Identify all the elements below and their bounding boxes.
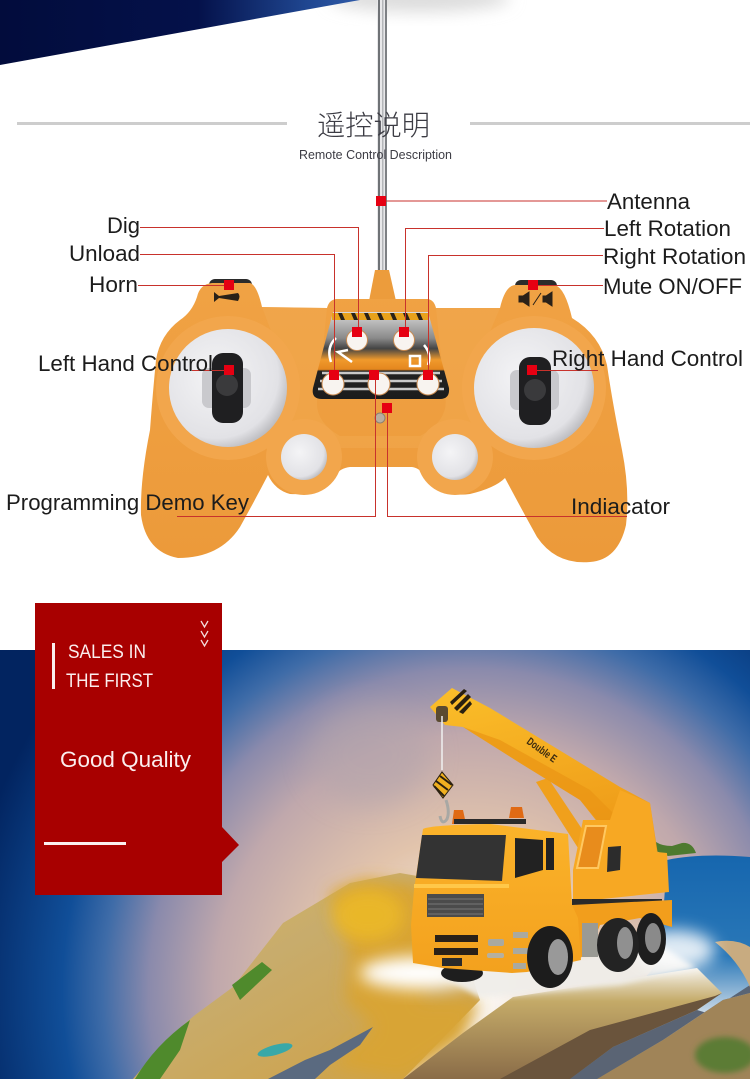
promo panel <box>35 603 239 895</box>
panel stripes <box>318 373 444 389</box>
license plate <box>442 958 462 966</box>
door window <box>515 838 543 878</box>
controller body <box>141 283 627 562</box>
indicator LED <box>375 413 385 423</box>
panel button lower left <box>322 373 344 395</box>
truck chassis <box>572 900 672 960</box>
right pad ring <box>417 419 493 495</box>
water channel <box>570 985 750 1079</box>
center panel <box>313 312 449 399</box>
label: Mute ON/OFF: Mute ON/OFF <box>603 274 742 299</box>
boom hazard stripes <box>450 689 472 714</box>
controller antenna <box>377 0 387 272</box>
remote controller <box>141 270 627 562</box>
terrain green patches <box>135 962 272 1079</box>
left round button <box>281 434 327 480</box>
promo line two: THE FIRST <box>66 671 153 692</box>
bumper vents <box>435 935 478 942</box>
hoist cable <box>441 716 443 770</box>
plateau shadow <box>500 993 722 1079</box>
promo tagline: Good Quality <box>60 747 191 772</box>
label: Left Rotation: Left Rotation <box>604 216 731 241</box>
label: Right Hand Control: Right Hand Control <box>552 346 743 371</box>
sky haze <box>310 705 430 805</box>
callout labels <box>6 189 746 519</box>
boom underside <box>463 727 640 840</box>
horizontal rule <box>44 842 126 845</box>
front wheel <box>527 926 573 988</box>
strut <box>536 778 588 848</box>
heading rule left <box>17 122 287 125</box>
section heading <box>17 110 750 162</box>
headlights <box>488 939 504 946</box>
horn icon <box>214 292 240 302</box>
boom text: Double E <box>524 736 559 765</box>
terrain golden highlight <box>330 880 480 1079</box>
label: Indicator: Indiacator <box>571 494 670 519</box>
left pad ring <box>266 419 342 495</box>
panel icons <box>329 338 429 366</box>
distant island <box>656 842 696 856</box>
label: Left Hand Control: Left Hand Control <box>38 351 213 376</box>
right joystick well <box>474 328 594 448</box>
right joystick ring <box>462 316 606 460</box>
antenna base <box>369 270 396 301</box>
right glow <box>635 930 715 970</box>
panel button lower right <box>417 373 439 395</box>
windshield <box>416 835 506 881</box>
hazard stripe <box>332 313 428 320</box>
right shoulder button <box>515 280 557 294</box>
cab belt line <box>414 884 509 888</box>
heading Chinese: 遥控说明 <box>317 110 430 141</box>
rear wheel <box>636 913 666 965</box>
sky <box>0 650 750 1079</box>
left joystick <box>202 353 251 423</box>
panel button top left <box>346 330 368 350</box>
chevrons <box>201 621 208 646</box>
label: Programming Demo Key: Programming Demo Key <box>6 490 249 515</box>
white glow under truck <box>360 957 480 989</box>
side steps <box>513 932 528 969</box>
beacon right <box>509 807 524 818</box>
top corner shadow <box>330 0 510 12</box>
terrain left <box>133 873 480 1079</box>
panel background <box>35 603 239 895</box>
mute icon <box>519 292 552 306</box>
left joystick ring <box>156 316 300 460</box>
left joystick well <box>169 329 287 447</box>
right terrain <box>597 993 750 1079</box>
lake <box>268 1027 373 1079</box>
grille slats <box>428 899 483 914</box>
silver step <box>582 923 598 957</box>
left shoulder button <box>209 279 252 293</box>
callout leader lines <box>138 201 627 516</box>
panel button lower center <box>368 373 390 395</box>
fog lights <box>487 953 504 958</box>
label: Unload: Unload <box>69 241 140 266</box>
pulley <box>436 706 448 722</box>
right rocky outcrop <box>715 941 750 987</box>
turquoise lake <box>256 1041 294 1059</box>
central rock plateau <box>403 968 722 1079</box>
white platform <box>440 945 697 998</box>
heading English: Remote Control Description <box>299 148 452 162</box>
middle wheel <box>597 918 639 972</box>
beacon left <box>452 810 466 824</box>
truck cab <box>411 824 581 973</box>
hook stripes <box>434 776 452 796</box>
crane truck <box>411 688 672 988</box>
boom <box>430 688 658 855</box>
callout markers <box>224 196 538 413</box>
chassis dark strip <box>572 899 662 905</box>
right round button <box>432 434 478 480</box>
hook block <box>433 772 453 798</box>
top banner corner <box>0 0 360 65</box>
bumper vents lower <box>434 948 478 955</box>
front hub <box>548 939 568 975</box>
body highlight <box>262 307 500 448</box>
label: Right Rotation: Right Rotation <box>603 244 746 269</box>
crane side window <box>607 846 621 872</box>
label: Horn: Horn <box>89 272 138 297</box>
label: Antenna: Antenna <box>607 189 691 214</box>
right terrain green <box>695 1037 750 1073</box>
middle hub <box>617 927 633 959</box>
right joystick <box>510 357 559 425</box>
terrain yellow glow <box>332 889 404 941</box>
roof bar <box>454 819 526 824</box>
truck front lower wheel <box>441 964 483 982</box>
crane house <box>573 790 669 902</box>
hook <box>440 800 448 822</box>
heading rule right <box>470 122 750 125</box>
label: Dig: Dig <box>107 213 140 238</box>
ocean <box>560 856 750 1079</box>
crane cab window <box>577 826 606 868</box>
grille <box>427 894 484 917</box>
promo line one: SALES IN <box>68 642 146 663</box>
side window small <box>546 838 554 870</box>
rear hub <box>645 923 661 953</box>
earth scene background <box>0 650 750 1079</box>
vertical bar <box>52 643 55 689</box>
panel button top right <box>394 330 414 350</box>
